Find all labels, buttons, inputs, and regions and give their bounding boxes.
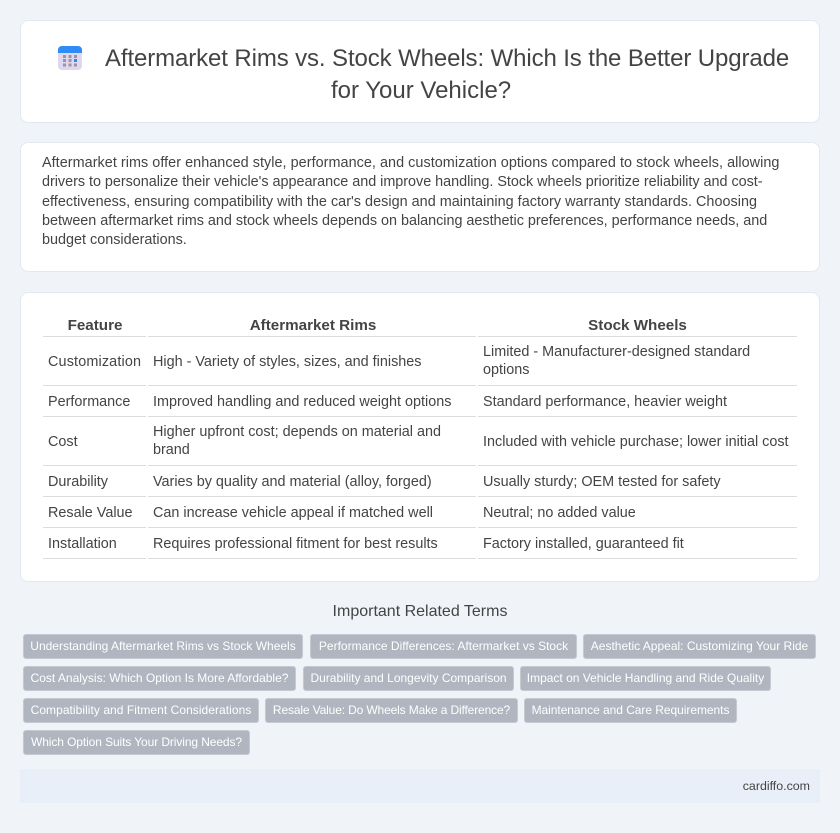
related terms tags: Which Option Suits Your Driving Needs? <box>31 735 242 749</box>
row: performance: Improved handling and reduced weight options <box>153 394 451 410</box>
row: performance: Performance <box>48 394 130 410</box>
panel: comparison table <box>20 292 820 582</box>
related terms tags: Maintenance and Care Requirements <box>532 703 729 717</box>
row: customization: Limited - Manufacturer-designed standard <box>483 344 750 360</box>
row: installation <box>48 536 684 552</box>
row: durability: Varies by quality and material (alloy, forged) <box>153 474 432 490</box>
intro text: drivers to personalize their vehicle's appearance and improve handling. Stock wheels prioritize reliability and cost- <box>42 174 763 190</box>
row: installation: Requires professional fitment for best results <box>153 536 438 552</box>
table: header row: Feature <box>68 317 122 334</box>
intro text: Aftermarket rims offer enhanced style, performance, and customization options compared to stock wheels, allowing <box>42 155 779 171</box>
row: durability: Usually sturdy; OEM tested for safety <box>483 474 721 490</box>
footer bar <box>20 769 820 803</box>
title: for Your Vehicle? <box>331 77 511 104</box>
row: customization: Customization <box>48 354 141 370</box>
icon: calendar <box>58 46 82 70</box>
intro text: effectiveness, ensuring compatibility with the car's design and maintaining factory warranty standards. Choosing <box>42 194 757 210</box>
row: performance <box>48 394 727 410</box>
panel: intro card <box>20 142 820 272</box>
intro text: budget considerations. <box>42 232 187 248</box>
related terms tags: Aesthetic Appeal: Customizing Your Ride <box>591 639 808 653</box>
related terms tags: Understanding Aftermarket Rims vs Stock Wheels <box>30 639 296 653</box>
row: resale value: Neutral; no added value <box>483 505 636 521</box>
row: cost <box>48 424 789 458</box>
title: Aftermarket Rims vs. Stock Wheels: Which Is the Better Upgrade <box>105 45 789 72</box>
row: resale value: Resale Value <box>48 505 133 521</box>
row: cost: Included with vehicle purchase; lower initial cost <box>483 434 789 450</box>
heading: important related terms: Important Related Terms <box>333 603 507 620</box>
row: performance: Standard performance, heavier weight <box>483 394 727 410</box>
related terms tags: Durability and Longevity Comparison <box>310 671 507 685</box>
table: header row: Stock Wheels <box>588 317 687 334</box>
row: customization: options <box>483 362 529 378</box>
panel: title card <box>20 20 820 123</box>
row: customization <box>48 344 750 378</box>
row: durability <box>48 474 721 490</box>
related terms tags <box>23 634 816 755</box>
related terms tags: Performance Differences: Aftermarket vs Stock <box>319 639 568 653</box>
footer source text: cardiffo.com <box>743 779 810 793</box>
row: resale value: Can increase vehicle appeal if matched well <box>153 505 433 521</box>
related terms tags: Cost Analysis: Which Option Is More Affordable? <box>31 671 288 685</box>
table: header row <box>68 317 687 334</box>
row: cost: Cost <box>48 434 78 450</box>
row: durability: Durability <box>48 474 108 490</box>
row: customization: High - Variety of styles, sizes, and finishes <box>153 354 421 370</box>
related terms tags: Resale Value: Do Wheels Make a Difference? <box>273 703 510 717</box>
row: cost: brand <box>153 442 190 458</box>
row: cost: Higher upfront cost; depends on material and <box>153 424 441 440</box>
row: installation: Factory installed, guaranteed fit <box>483 536 684 552</box>
row: resale value <box>48 505 636 521</box>
table: header row: Aftermarket Rims <box>250 317 376 334</box>
related terms tags: Impact on Vehicle Handling and Ride Quality <box>527 671 764 685</box>
title <box>105 45 789 104</box>
intro text <box>42 155 779 248</box>
related terms tags: Compatibility and Fitment Considerations <box>31 703 251 717</box>
row: installation: Installation <box>48 536 117 552</box>
intro text: between aftermarket rims and stock wheels depends on balancing aesthetic preferences, performance needs, and <box>42 212 767 228</box>
